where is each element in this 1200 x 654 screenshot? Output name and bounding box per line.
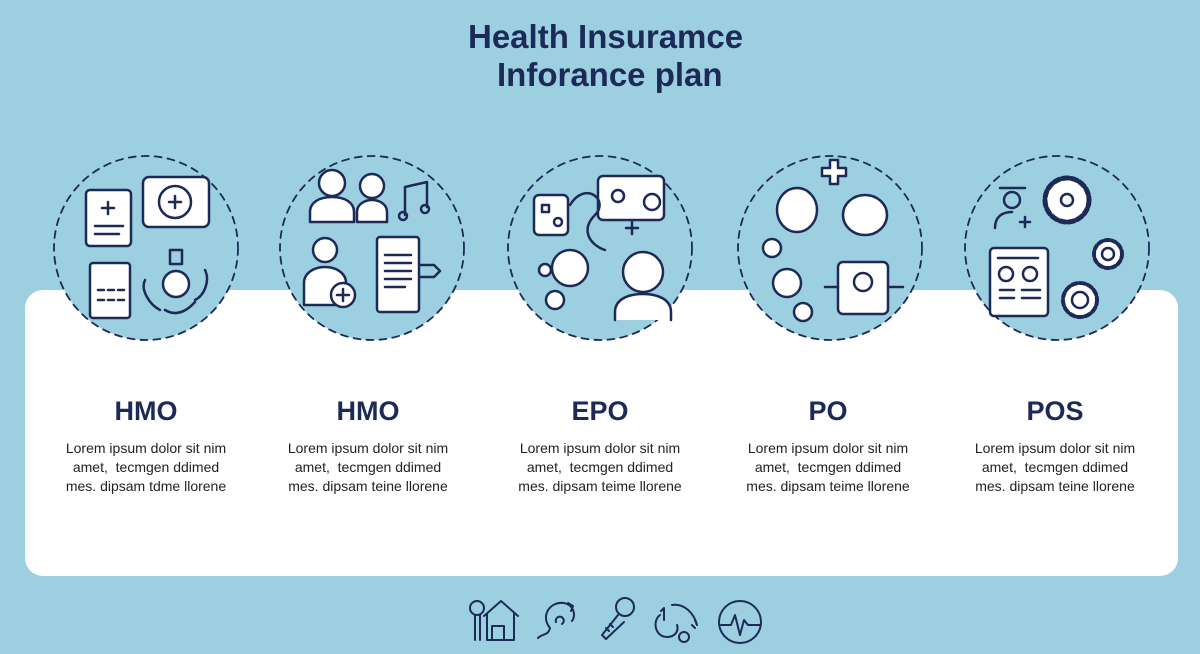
column 5: amet, tecmgen ddimed: [982, 459, 1128, 475]
column 3: amet, tecmgen ddimed: [527, 459, 673, 475]
column 2: Lorem ipsum dolor sit nim: [288, 440, 448, 456]
column 1: HMO: [114, 396, 178, 426]
title: Inforance plan: [497, 56, 723, 93]
white panel: [25, 290, 1178, 576]
column 4: amet, tecmgen ddimed: [755, 459, 901, 475]
column 3: EPO: [571, 396, 629, 426]
circle 5: [965, 156, 1149, 340]
column 4: mes. dipsam teime llorene: [746, 478, 910, 494]
circle 4: [738, 156, 922, 340]
column 3: mes. dipsam teime llorene: [518, 478, 682, 494]
column 2: mes. dipsam teine llorene: [288, 478, 448, 494]
column 5: Lorem ipsum dolor sit nim: [975, 440, 1135, 456]
column 2: HMO: [336, 396, 400, 426]
column 3: [518, 396, 682, 494]
column 4: Lorem ipsum dolor sit nim: [748, 440, 908, 456]
column 4: PO: [808, 396, 848, 426]
circle 3: [508, 156, 692, 340]
column 1: mes. dipsam tdme llorene: [66, 478, 226, 494]
column 1: [66, 396, 226, 494]
column 1: Lorem ipsum dolor sit nim: [66, 440, 226, 456]
circle 1: [54, 156, 238, 340]
column 3: Lorem ipsum dolor sit nim: [520, 440, 680, 456]
column 5: [975, 396, 1135, 494]
title: Health Insuramce: [468, 18, 743, 55]
bottom icons: [470, 598, 761, 643]
column 5: mes. dipsam teine llorene: [975, 478, 1135, 494]
column 1: amet, tecmgen ddimed: [73, 459, 219, 475]
column 4: [746, 396, 910, 494]
circle 2: [280, 156, 464, 340]
column 2: amet, tecmgen ddimed: [295, 459, 441, 475]
title: [468, 18, 743, 93]
column 5: POS: [1026, 396, 1084, 426]
column 2: [288, 396, 448, 494]
